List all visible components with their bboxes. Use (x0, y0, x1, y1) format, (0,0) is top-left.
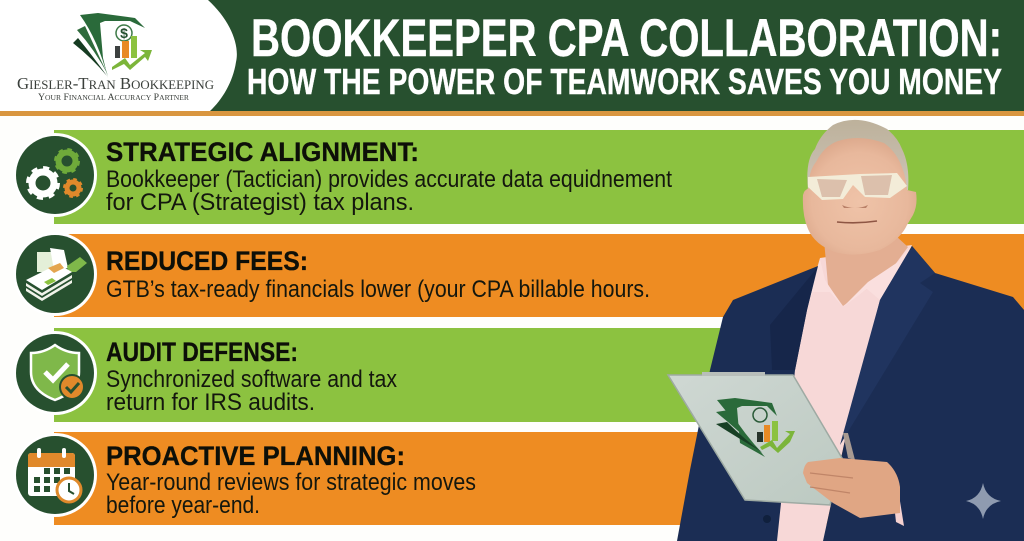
body text: for CPA (Strategist) tax plans. (106, 189, 414, 216)
body text: Year-round reviews for strategic moves (106, 469, 476, 496)
icon: logo sheets and chart (73, 13, 152, 78)
face (803, 138, 917, 255)
body text: Synchronized software and tax (106, 366, 397, 393)
icon: sparkle watermark (966, 483, 1001, 519)
logo name: GIESLER-TRAN BOOKKEEPING (17, 74, 214, 93)
jacket (677, 246, 1024, 541)
neck (824, 236, 908, 306)
body text: before year-end. (106, 492, 260, 519)
person (668, 120, 1024, 541)
icon: gears (28, 150, 82, 198)
hand (803, 458, 900, 518)
icon: shield with check (31, 345, 84, 400)
body text: return for IRS audits. (106, 389, 315, 416)
heading: STRATEGIC ALIGNMENT: (106, 137, 419, 167)
body text (106, 469, 476, 519)
icon: calendar with clock (28, 448, 81, 502)
icon: logo sheets and chart: $ (120, 25, 128, 41)
title (247, 9, 1002, 102)
shirt collar (805, 245, 912, 310)
logo (17, 13, 214, 102)
icon: documents and tag (26, 248, 87, 301)
body text: Bookkeeper (Tactician) provides accurate data equidnement (106, 166, 672, 193)
heading: AUDIT DEFENSE: (106, 337, 298, 367)
clipboard (668, 372, 842, 505)
heading: REDUCED FEES: (106, 246, 308, 276)
panel: audit defense (13, 328, 1024, 422)
heading: PROACTIVE PLANNING: (106, 441, 405, 471)
body text (106, 166, 672, 216)
hair (807, 120, 908, 190)
jacket button (763, 515, 771, 523)
glasses (808, 173, 907, 200)
panel: reduced fees (13, 232, 1024, 317)
shirt cuff (893, 495, 904, 526)
logo tagline: YOUR FINANCIAL ACCURACY PARTNER (38, 92, 189, 102)
panel: proactive planning (13, 432, 1024, 525)
header banner (0, 0, 1024, 116)
pen (843, 433, 855, 460)
body text (106, 366, 397, 416)
body text: GTB’s tax-ready financials lower (your CPA billable hours. (106, 276, 650, 303)
jacket lapels (770, 246, 935, 445)
nose and smile (837, 205, 877, 223)
shirt (777, 245, 912, 541)
panel: strategic alignment (13, 130, 1024, 224)
icon: clipboard logo (716, 398, 795, 457)
